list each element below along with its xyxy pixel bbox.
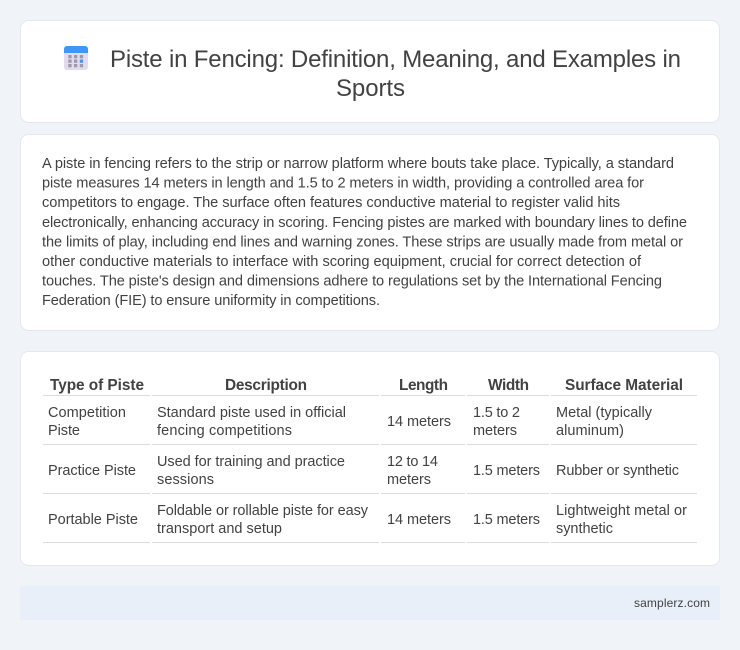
- table row: competition piste: Competition: [48, 405, 126, 421]
- table row: practice piste: meters: [387, 472, 431, 488]
- table row: practice piste: 1.5 meters: [473, 463, 540, 479]
- table row: competition piste: 1.5 to 2: [473, 405, 520, 421]
- table header row: Type of Piste: [50, 377, 144, 394]
- text block: definition paragraph: A piste in fencing refers to the strip or narrow platform where bouts take place. Typically, a standard: [42, 156, 674, 172]
- table row: practice piste: 12 to 14: [387, 454, 438, 470]
- table row: competition piste: Standard piste used in official: [157, 405, 346, 421]
- table row: practice piste: Rubber or synthetic: [556, 463, 679, 479]
- table header row: Surface Material: [565, 377, 683, 394]
- table header row: Width: [488, 377, 529, 394]
- table row: competition piste: meters: [473, 423, 517, 439]
- table row: practice piste: Practice Piste: [48, 463, 136, 479]
- table row: portable piste: Portable Piste: [48, 512, 138, 528]
- panel: description: [20, 134, 720, 330]
- table row: portable piste: synthetic: [556, 521, 613, 537]
- text block: definition paragraph: the limits of play, including end lines and warning zones. These strips are usually made from metal or: [42, 234, 683, 250]
- table row: portable piste: 1.5 meters: [473, 512, 540, 528]
- table row: competition piste: [43, 405, 697, 445]
- panel: header: [20, 20, 720, 122]
- text block: definition paragraph: electronically, enhancing accuracy in scoring. Fencing pistes are marked with boundary lines to define: [42, 215, 687, 231]
- title: [110, 46, 681, 102]
- text block: definition paragraph: [42, 156, 687, 309]
- title: Piste in Fencing: Definition, Meaning, and Examples in: [110, 46, 681, 73]
- text block: definition paragraph: Federation (FIE) to ensure uniformity in competitions.: [42, 293, 380, 309]
- panel: table card: [20, 352, 720, 566]
- table row: competition piste: 14 meters: [387, 414, 451, 430]
- text block: definition paragraph: piste measures 14 meters in length and 1.5 to 2 meters in width, providing a controlled area for: [42, 176, 644, 192]
- title: Sports: [336, 75, 405, 102]
- table row: competition piste: Metal (typically: [556, 405, 653, 421]
- text block: definition paragraph: other conductive materials to interface with scoring equipment, crucial for correct detection of: [42, 254, 642, 270]
- table row: portable piste: transport and setup: [157, 521, 282, 537]
- footer: samplerz.com: [634, 596, 710, 610]
- table row: portable piste: 14 meters: [387, 512, 451, 528]
- table header row: Description: [225, 377, 307, 394]
- icon: calendar: [64, 46, 88, 70]
- table row: portable piste: [43, 503, 697, 543]
- text block: definition paragraph: touches. The piste's design and dimensions adhere to regulations set by the International Fencing: [42, 274, 662, 290]
- table row: practice piste: Used for training and practice: [157, 454, 345, 470]
- table row: practice piste: sessions: [157, 472, 214, 488]
- table header row: Length: [399, 377, 448, 394]
- table row: competition piste: aluminum): [556, 423, 624, 439]
- table row: competition piste: fencing competitions: [157, 423, 292, 439]
- footer: [20, 586, 720, 620]
- table header row: [43, 377, 697, 396]
- table row: competition piste: Piste: [48, 423, 80, 439]
- table row: portable piste: Foldable or rollable piste for easy: [157, 503, 369, 519]
- text block: definition paragraph: competitors to engage. The surface often features conductive material to register valid hits: [42, 195, 620, 211]
- table row: portable piste: Lightweight metal or: [556, 503, 687, 519]
- table row: practice piste: [43, 454, 697, 494]
